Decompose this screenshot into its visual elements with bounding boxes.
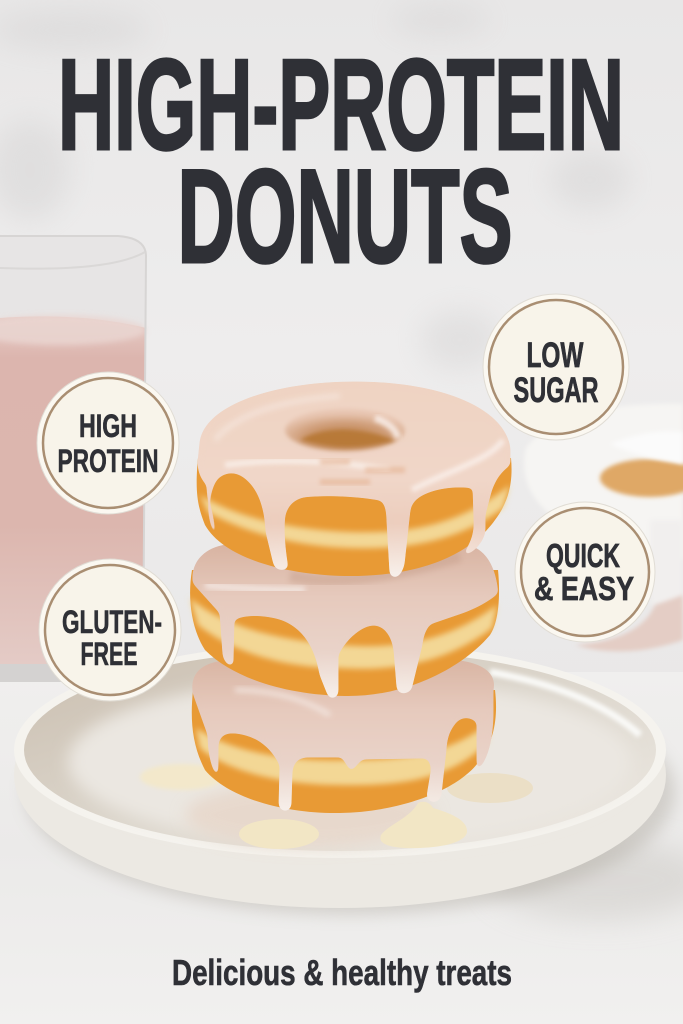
background: marble wall xyxy=(0,0,683,700)
donut: bottom xyxy=(192,656,496,813)
donut: top xyxy=(197,382,512,577)
badge: high protein: PROTEIN xyxy=(58,443,158,479)
badge: low sugar: LOW xyxy=(526,336,584,375)
badge: gluten-free: GLUTEN- xyxy=(62,604,162,640)
badge: low sugar xyxy=(483,294,629,440)
badge: gluten-free xyxy=(39,559,181,701)
donut: middle xyxy=(190,544,499,698)
badge: low sugar: SUGAR xyxy=(514,371,598,410)
title xyxy=(58,33,624,291)
badge: gluten-free: FREE xyxy=(80,636,138,672)
glass of pink milk xyxy=(0,236,146,682)
spilled glaze on plate xyxy=(140,764,533,849)
badge: high protein: HIGH xyxy=(79,408,137,444)
background: marble table xyxy=(0,672,683,1024)
badge: quick and easy xyxy=(515,502,655,642)
tagline: Delicious & healthy treats xyxy=(172,952,512,993)
badge: quick and easy: QUICK xyxy=(546,537,620,574)
plate xyxy=(14,642,675,914)
badge: quick and easy: & EASY xyxy=(534,570,634,607)
bowl in background xyxy=(524,404,683,651)
badge: high protein xyxy=(37,372,179,514)
